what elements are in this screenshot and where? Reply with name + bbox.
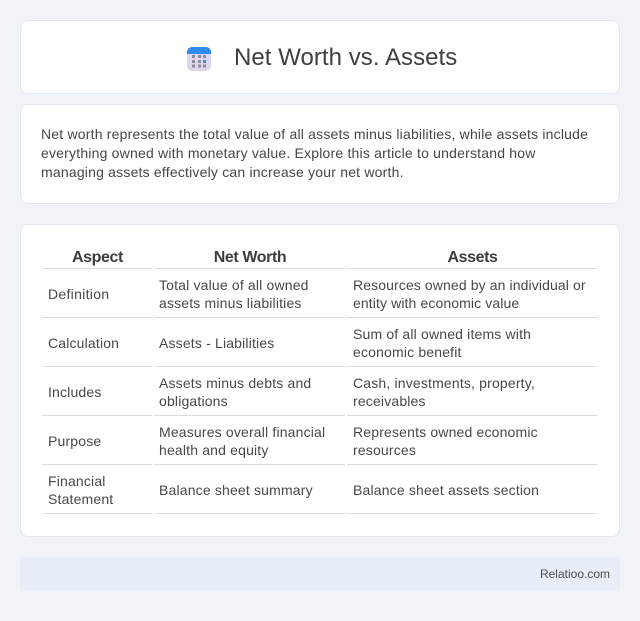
table header row: Assets bbox=[447, 249, 498, 266]
row: definition: entity with economic value bbox=[353, 295, 519, 311]
row: includes: Includes bbox=[48, 384, 102, 400]
table header row bbox=[72, 249, 498, 266]
row: includes: receivables bbox=[353, 393, 426, 409]
title: Net Worth vs. Assets bbox=[234, 44, 457, 71]
row: purpose bbox=[48, 424, 538, 458]
row: calculation: Assets - Liabilities bbox=[159, 335, 274, 351]
row: includes: Cash, investments, property, bbox=[353, 375, 535, 391]
row: definition: Resources owned by an individual or bbox=[353, 277, 586, 293]
footer bbox=[20, 557, 620, 591]
row: includes: Assets minus debts and bbox=[159, 375, 311, 391]
row: purpose: health and equity bbox=[159, 442, 269, 458]
comparison table bbox=[42, 249, 597, 514]
icon: calendar bbox=[187, 47, 211, 71]
row: includes: obligations bbox=[159, 393, 228, 409]
row: includes bbox=[48, 375, 535, 409]
intro paragraph bbox=[41, 126, 588, 180]
panel: intro text bbox=[20, 104, 620, 204]
row: financial statement: Financial bbox=[48, 473, 106, 489]
panel: comparison table bbox=[20, 224, 620, 537]
row: financial statement bbox=[48, 473, 539, 507]
row: financial statement: Balance sheet assets section bbox=[353, 482, 539, 498]
row: purpose: resources bbox=[353, 442, 416, 458]
row: definition: assets minus liabilities bbox=[159, 295, 302, 311]
row: calculation: economic benefit bbox=[353, 344, 462, 360]
row: calculation: Sum of all owned items with bbox=[353, 326, 531, 342]
intro paragraph: managing assets effectively can increase your net worth. bbox=[41, 164, 404, 180]
row: definition: Total value of all owned bbox=[159, 277, 309, 293]
footer text: Relatioo.com bbox=[540, 567, 610, 581]
row: purpose: Represents owned economic bbox=[353, 424, 538, 440]
table header row: Net Worth bbox=[214, 249, 286, 266]
intro paragraph: Net worth represents the total value of all assets minus liabilities, while assets include bbox=[41, 126, 588, 142]
intro paragraph: everything owned with monetary value. Explore this article to understand how bbox=[41, 145, 536, 161]
row: definition: Definition bbox=[48, 286, 109, 302]
row: calculation: Calculation bbox=[48, 335, 119, 351]
panel: header bbox=[20, 20, 620, 94]
row: purpose: Measures overall financial bbox=[159, 424, 325, 440]
row: definition bbox=[48, 277, 586, 311]
row: financial statement: Statement bbox=[48, 491, 113, 507]
row: calculation bbox=[48, 326, 531, 360]
row: financial statement: Balance sheet summary bbox=[159, 482, 313, 498]
table header row: Aspect bbox=[72, 249, 123, 266]
row: purpose: Purpose bbox=[48, 433, 101, 449]
